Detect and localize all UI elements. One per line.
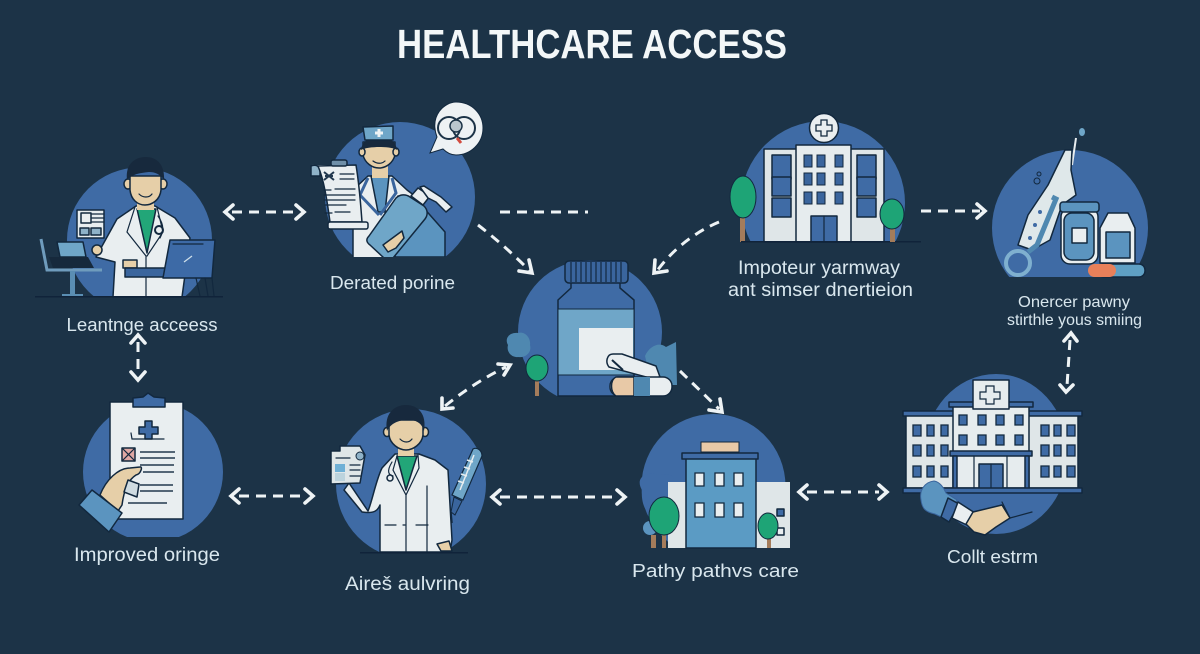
icon: chart card: [331, 446, 365, 484]
title: HEALTHCARE ACCESS: [397, 21, 787, 67]
arrow: doctor to clinic: [492, 490, 625, 504]
icon: speech bubble: [430, 102, 483, 155]
icon: left laptop desk: [41, 239, 102, 297]
icon: pills: [607, 354, 672, 396]
icon: tree left: [643, 497, 679, 548]
arrow: leantnge to clipboard: [131, 335, 145, 380]
icon: building: [741, 145, 921, 242]
arrow: doctor to bottle: [442, 364, 510, 409]
panel: medicine bottle: [507, 260, 677, 404]
icon: hospital: [903, 380, 1082, 493]
ground line: [35, 296, 223, 298]
panel: clinic building: [640, 414, 790, 558]
label: improved oringe: Improved oringe: [74, 545, 220, 566]
arrow: dashed link: [500, 210, 588, 214]
icon: syringe tube: [1006, 128, 1085, 275]
icon: clinic: [668, 442, 790, 548]
icon: hand: [79, 467, 141, 532]
icon: bottle: [558, 261, 634, 396]
icon: tree left: [730, 176, 756, 242]
panel: doctor with thermometer: [331, 405, 486, 559]
label: improved pathway: ant simser dnertieion: [728, 280, 913, 301]
icon: right cloud: [645, 342, 677, 385]
label: derated porine: Derated porine: [330, 273, 455, 293]
icon: right laptop: [125, 240, 215, 296]
label: onercer pawny: [1007, 294, 1142, 329]
icon: clipboard scroll: [311, 160, 368, 229]
icon: left cloud and tree: [507, 333, 548, 396]
label: onercer pawny: Onercer pawny: [1018, 294, 1130, 311]
ground line: [360, 552, 468, 554]
icon: small bottle: [1100, 213, 1135, 263]
panel: clipboard: [79, 393, 223, 542]
icon: jar: [1060, 202, 1099, 264]
icon: nurse: [353, 126, 415, 258]
icon: doctor figure: [344, 405, 452, 552]
label: pathy pathvs care: Pathy pathvs care: [632, 560, 799, 581]
panel: city hospital: [730, 113, 921, 243]
arrow: clipboard to doctor: [231, 489, 313, 503]
icon: clipboard sheet: [110, 393, 183, 519]
arrow: nurse to bottle: [478, 225, 532, 273]
icon: handshake: [921, 481, 1032, 535]
arrow: doctor to nurse: [225, 205, 304, 219]
arrow: hospital to tools: [921, 204, 985, 218]
icon: doctor figure: [92, 157, 190, 297]
icon: pump bottle: [367, 186, 452, 258]
panel: nurse with scroll: [311, 102, 483, 272]
icon: report card: [77, 210, 104, 238]
icon: capsule: [1088, 264, 1145, 277]
panel: doctor at laptops: [35, 157, 223, 312]
label: improved pathway: Impoteur yarmway: [738, 258, 901, 279]
icon: tree right: [880, 199, 904, 242]
icon: bush: [640, 474, 674, 516]
icon: cross badge: [810, 114, 838, 142]
label: collt estrm: Collt estrm: [947, 546, 1038, 567]
label: improved pathway: [728, 258, 913, 301]
icon: thermometer: [451, 448, 482, 523]
arrow: tools to hospital: [1060, 333, 1077, 392]
panel: hospital handshake: [903, 374, 1082, 535]
arrow: hospital to bottle: [654, 222, 719, 273]
arrow: clinic to hospital: [799, 485, 887, 499]
arrow: bottle to clinic: [680, 371, 722, 412]
label: onercer pawny: stirthle yous smiing: [1007, 312, 1142, 329]
panel: medical tools: [992, 128, 1148, 278]
label: aires aulvring: Aireš aulvring: [345, 574, 470, 595]
icon: tree right: [758, 513, 778, 548]
label: leantnge access: Leantnge acceess: [66, 315, 218, 335]
